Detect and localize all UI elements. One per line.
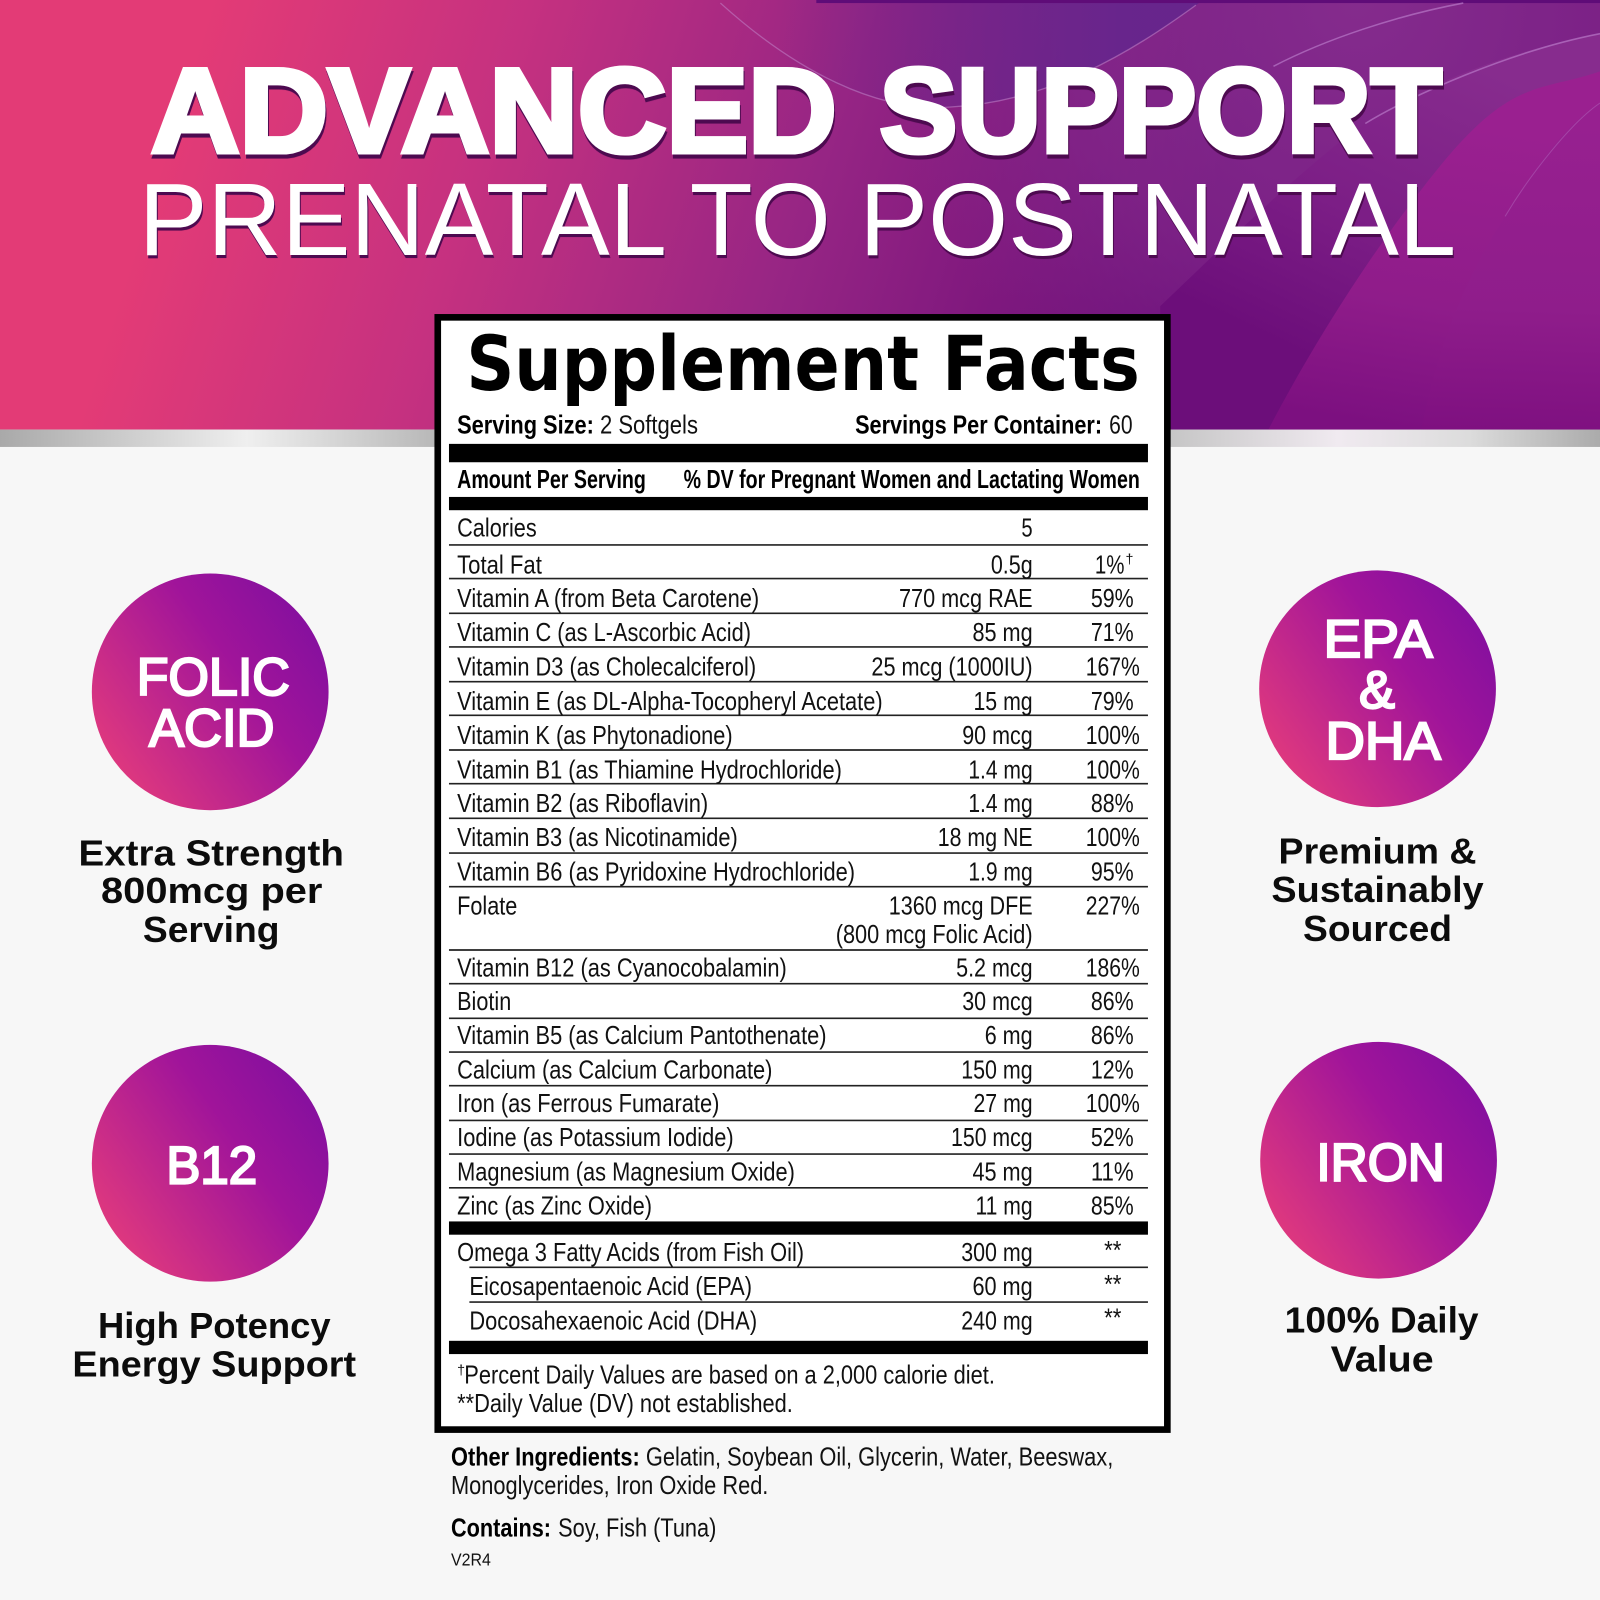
row: vitamin k: Vitamin K (as Phytonadione)	[457, 722, 733, 750]
row: vitamin b12	[457, 955, 1140, 983]
badge: iron: IRON	[1316, 1134, 1445, 1193]
serving size: Serving Size:	[457, 412, 594, 440]
badge: folic acid	[92, 573, 329, 810]
caption: daily value: Value	[1331, 1339, 1434, 1379]
row: vitamin d3: 25 mcg (1000IU)	[871, 654, 1033, 682]
row: vitamin b1: Vitamin B1 (as Thiamine Hydrochloride)	[457, 757, 842, 785]
badge: epa and dha: &	[1359, 661, 1395, 720]
row: vitamin a: Vitamin A (from Beta Carotene)	[457, 585, 759, 613]
version code: V2R4	[451, 1549, 491, 1569]
row: calcium: 150 mg	[961, 1057, 1033, 1085]
caption: high potency	[72, 1306, 356, 1385]
table header bar top	[449, 444, 1148, 462]
row: calories: 5	[1021, 515, 1033, 543]
row: magnesium: 11%	[1091, 1159, 1134, 1187]
row: dha: **	[1104, 1305, 1121, 1333]
caption: premium: Premium &	[1279, 831, 1477, 871]
row: iron: 100%	[1086, 1090, 1140, 1118]
row: zinc: 85%	[1091, 1192, 1134, 1220]
row: dha: 240 mg	[961, 1308, 1033, 1336]
caption: extra strength: Extra Strength	[79, 833, 344, 873]
row: folate: 227%	[1086, 892, 1140, 920]
row: vitamin b6: 1.9 mg	[968, 859, 1033, 887]
row: vitamin b12: 5.2 mcg	[956, 955, 1033, 983]
row: vitamin b12: Vitamin B12 (as Cyanocobalamin)	[457, 955, 787, 983]
nutrient rows	[457, 515, 1140, 1220]
row: vitamin c	[457, 619, 1134, 647]
heading: supplement facts: Supplement Facts	[466, 320, 1140, 408]
row: dha	[469, 1305, 1121, 1336]
row: iron: 27 mg	[973, 1090, 1033, 1118]
row: vitamin e: Vitamin E (as DL-Alpha-Tocopheryl Acetate)	[457, 688, 883, 716]
serving size	[457, 412, 698, 440]
title: advanced support	[151, 45, 1442, 178]
footnotes: †	[457, 1362, 465, 1378]
row: iodine: 150 mcg	[951, 1124, 1033, 1152]
row: magnesium	[457, 1159, 1134, 1187]
caption: daily value	[1285, 1301, 1479, 1379]
row: epa: 60 mg	[972, 1273, 1033, 1301]
row: vitamin b3: 100%	[1086, 824, 1140, 852]
divider bar above omega	[449, 1221, 1148, 1235]
badge: epa and dha: EPA	[1323, 610, 1433, 669]
row: vitamin b12: 186%	[1086, 955, 1140, 983]
subtitle: prenatal to postnatal: PRENATAL TO POSTNATAL	[139, 162, 1456, 277]
row: folate: (800 mcg Folic Acid)	[836, 921, 1033, 949]
row: iodine	[457, 1124, 1134, 1152]
row: vitamin b1: 1.4 mg	[968, 757, 1033, 785]
row: total fat: 0.5g	[991, 551, 1033, 579]
other ingredients: Other Ingredients:	[451, 1443, 640, 1471]
badge: folic acid: FOLIC	[137, 648, 290, 707]
row: omega 3	[457, 1237, 1121, 1267]
omega rows	[457, 1237, 1121, 1336]
row: folate: Folate	[457, 892, 517, 920]
row: vitamin b6: 95%	[1091, 859, 1134, 887]
row: total fat: 1%	[1095, 551, 1124, 579]
badge: b12: B12	[166, 1137, 257, 1196]
servings per container: Servings Per Container:	[855, 412, 1102, 440]
caption: high potency: Energy Support	[72, 1345, 356, 1385]
footnotes	[457, 1362, 995, 1418]
row: vitamin b5: 86%	[1091, 1022, 1134, 1050]
row: vitamin b2	[457, 790, 1134, 818]
footnotes: Percent Daily Values are based on a 2,000 calorie diet.	[464, 1362, 995, 1390]
row: omega 3: **	[1104, 1237, 1121, 1265]
row: vitamin b2: 1.4 mg	[968, 790, 1033, 818]
column headers	[457, 466, 1140, 494]
row: vitamin d3: 167%	[1086, 654, 1140, 682]
row: iodine: Iodine (as Potassium Iodide)	[457, 1124, 734, 1152]
row: iron: Iron (as Ferrous Fumarate)	[457, 1090, 719, 1118]
row: vitamin a: 59%	[1091, 585, 1134, 613]
contains: Contains:	[451, 1515, 551, 1543]
caption: high potency: High Potency	[98, 1306, 331, 1346]
row: vitamin k	[457, 722, 1140, 750]
caption: extra strength: 800mcg per	[101, 871, 323, 911]
badge: epa and dha: DHA	[1326, 712, 1441, 771]
row: vitamin b5: 6 mg	[985, 1022, 1033, 1050]
row: vitamin c: Vitamin C (as L-Ascorbic Acid)	[457, 619, 751, 647]
row: vitamin b5	[457, 1022, 1134, 1050]
row: calories: Calories	[457, 515, 537, 543]
table header bar bottom	[449, 497, 1148, 510]
badge: folic acid: ACID	[149, 699, 274, 758]
contains	[451, 1515, 716, 1543]
row: folate: 1360 mcg DFE	[889, 892, 1033, 920]
row: vitamin k: 90 mcg	[962, 722, 1033, 750]
badge: epa and dha	[1259, 570, 1496, 807]
row: total fat: †	[1126, 551, 1133, 567]
row: calcium: Calcium (as Calcium Carbonate)	[457, 1057, 772, 1085]
row: zinc: 11 mg	[976, 1192, 1033, 1220]
row: biotin	[457, 988, 1134, 1016]
row: vitamin d3: Vitamin D3 (as Cholecalciferol)	[457, 654, 756, 682]
row: vitamin b5: Vitamin B5 (as Calcium Pantothenate)	[457, 1022, 827, 1050]
row: omega 3: Omega 3 Fatty Acids (from Fish Oil)	[457, 1239, 804, 1267]
row: omega 3: 300 mg	[961, 1239, 1033, 1267]
row: vitamin c: 85 mg	[972, 619, 1033, 647]
other ingredients	[451, 1443, 1113, 1500]
row: folate	[457, 892, 1140, 949]
title: advanced support: ADVANCED	[151, 45, 837, 178]
row: biotin: Biotin	[457, 988, 511, 1016]
panel: supplement facts	[438, 317, 1167, 1430]
row: iodine: 52%	[1091, 1124, 1134, 1152]
row: vitamin a	[457, 585, 1134, 613]
caption: premium	[1271, 831, 1484, 949]
row: epa: **	[1104, 1271, 1121, 1299]
row: vitamin b2: 88%	[1091, 790, 1134, 818]
contains: Soy, Fish (Tuna)	[558, 1515, 716, 1543]
badge: iron	[1260, 1042, 1497, 1279]
divider bar below omega	[449, 1341, 1148, 1354]
row: magnesium: Magnesium (as Magnesium Oxide)	[457, 1159, 795, 1187]
footnotes: **Daily Value (DV) not established.	[457, 1390, 793, 1418]
silver strip left	[0, 430, 449, 447]
row: vitamin k: 100%	[1086, 722, 1140, 750]
row: vitamin c: 71%	[1091, 619, 1134, 647]
row: dha: Docosahexaenoic Acid (DHA)	[469, 1308, 757, 1336]
row: magnesium: 45 mg	[972, 1159, 1033, 1187]
row: calories	[457, 515, 1033, 543]
row: vitamin e: 79%	[1091, 688, 1134, 716]
row: vitamin b6	[457, 859, 1134, 887]
row: vitamin a: 770 mcg RAE	[899, 585, 1033, 613]
row: zinc: Zinc (as Zinc Oxide)	[457, 1192, 652, 1220]
row: zinc	[457, 1192, 1134, 1220]
header banner background	[0, 0, 1600, 430]
caption: premium: Sustainably	[1271, 870, 1484, 910]
row: vitamin b3	[457, 824, 1140, 852]
column headers: Amount Per Serving	[457, 466, 646, 494]
silver strip right	[1163, 430, 1600, 447]
row: total fat	[457, 551, 1133, 579]
row: vitamin b1: 100%	[1086, 757, 1140, 785]
row: vitamin b3: Vitamin B3 (as Nicotinamide)	[457, 824, 738, 852]
row: epa	[469, 1271, 1121, 1301]
other ingredients: Monoglycerides, Iron Oxide Red.	[451, 1472, 768, 1500]
row: total fat: Total Fat	[457, 551, 542, 579]
row: iron	[457, 1090, 1140, 1118]
caption: premium: Sourced	[1303, 909, 1452, 949]
badge: b12	[92, 1045, 329, 1282]
row: biotin: 30 mcg	[962, 988, 1033, 1016]
caption: extra strength: Serving	[143, 910, 280, 950]
row: vitamin b3: 18 mg NE	[938, 824, 1033, 852]
other ingredients: Gelatin, Soybean Oil, Glycerin, Water, Beeswax,	[646, 1443, 1113, 1471]
serving size: 2 Softgels	[600, 412, 698, 440]
row: vitamin b6: Vitamin B6 (as Pyridoxine Hydrochloride)	[457, 859, 855, 887]
row: epa: Eicosapentaenoic Acid (EPA)	[469, 1273, 752, 1301]
row: vitamin b2: Vitamin B2 (as Riboflavin)	[457, 790, 708, 818]
row: biotin: 86%	[1091, 988, 1134, 1016]
servings per container: 60	[1109, 412, 1133, 440]
row: calcium	[457, 1057, 1134, 1085]
row: vitamin d3	[457, 654, 1140, 682]
row: vitamin b1	[457, 757, 1140, 785]
row: calcium: 12%	[1091, 1057, 1134, 1085]
title: advanced support: SUPPORT	[880, 45, 1442, 178]
row: vitamin e: 15 mg	[973, 688, 1033, 716]
column headers: % DV for Pregnant Women and Lactating Women	[684, 466, 1140, 494]
caption: extra strength	[79, 833, 344, 950]
caption: daily value: 100% Daily	[1285, 1301, 1479, 1341]
